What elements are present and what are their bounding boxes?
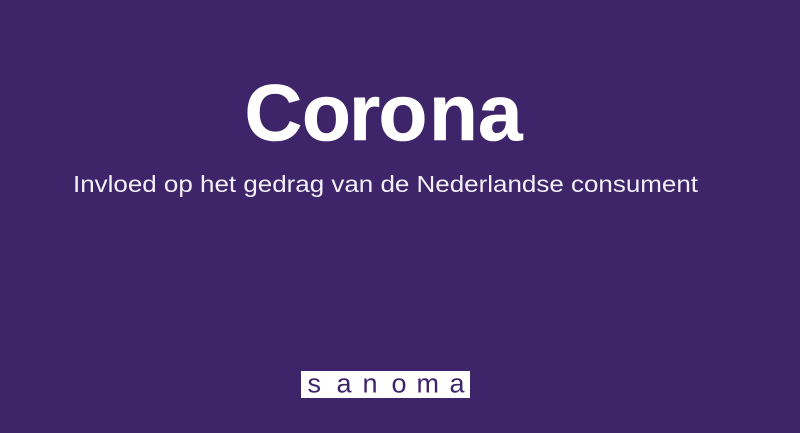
- title: Corona: [244, 68, 523, 157]
- logo: sanoma: sanoma: [308, 368, 466, 398]
- subtitle: Invloed op het gedrag van de Nederlandse consument: [73, 171, 699, 197]
